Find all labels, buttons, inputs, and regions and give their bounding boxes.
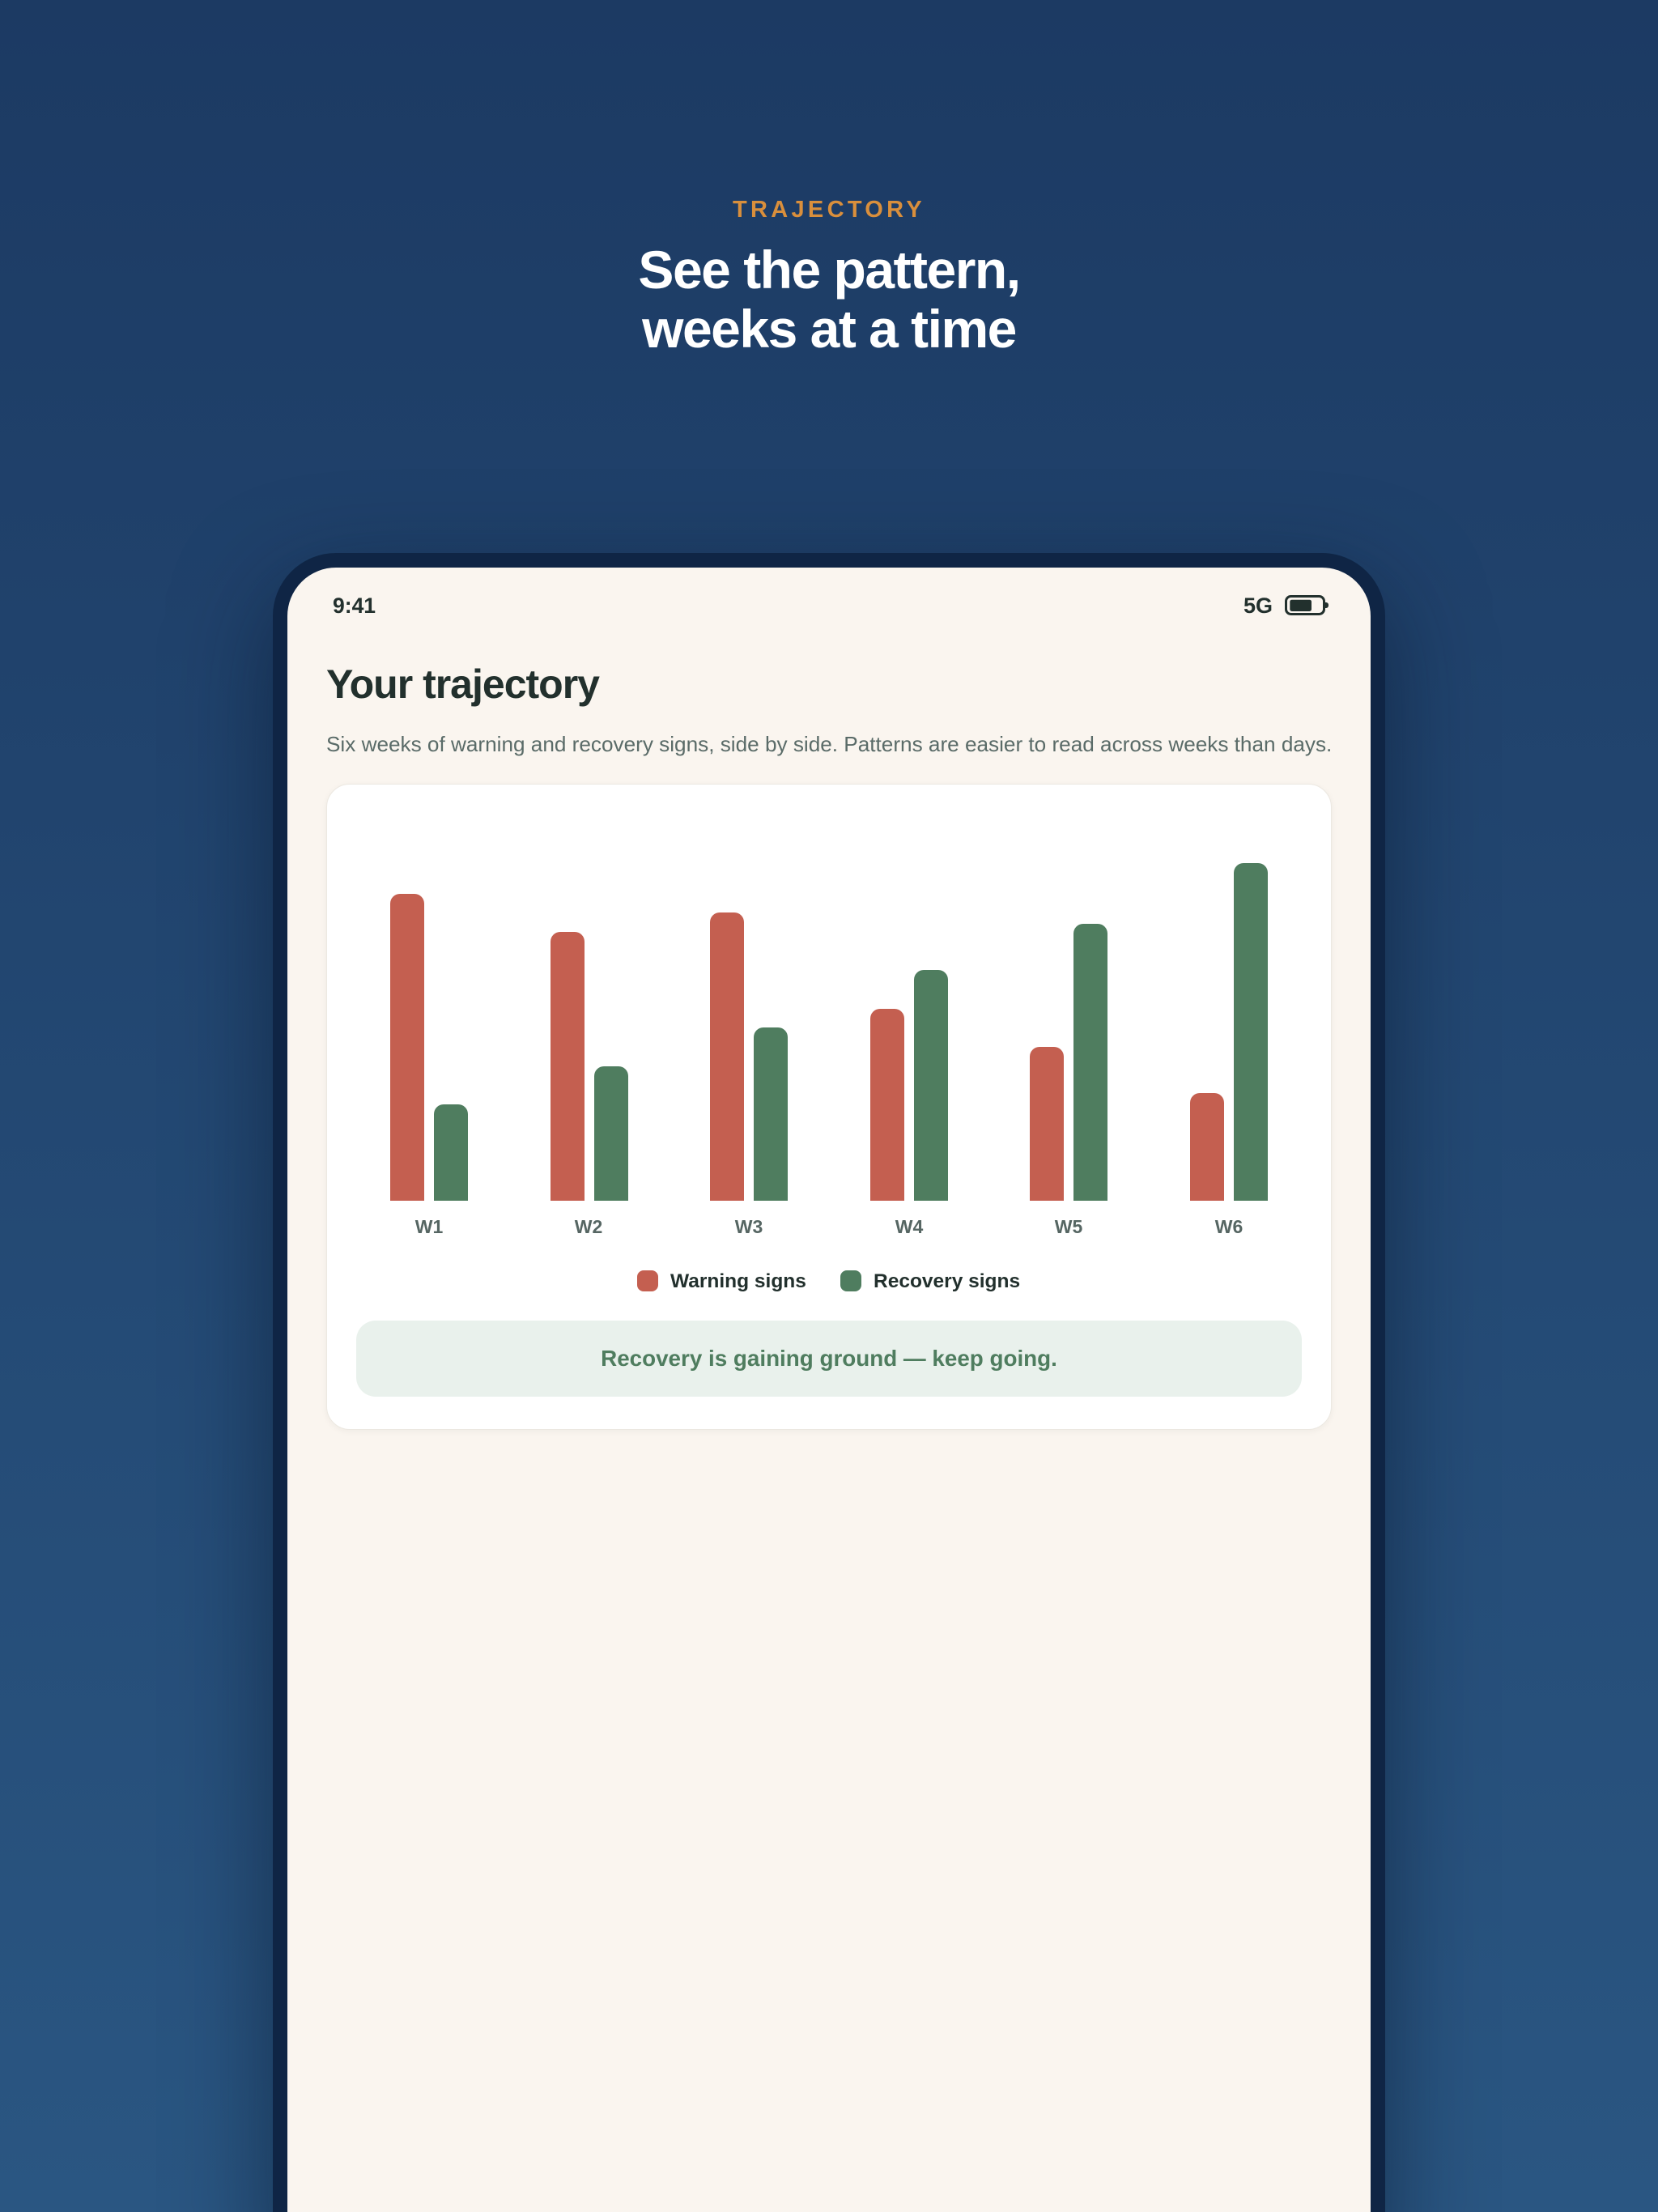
legend label: recovery: Recovery signs: [874, 1270, 1020, 1292]
headline: See the pattern,: [638, 240, 1020, 300]
panel: chart card: [326, 784, 1332, 1430]
week 3 bars: [710, 912, 788, 1201]
week labels: W5: [1055, 1216, 1082, 1237]
week labels: W3: [735, 1216, 763, 1237]
legend: [637, 1270, 1020, 1292]
icon: battery: [1285, 595, 1329, 615]
headline: weeks at a time: [642, 299, 1016, 359]
week 1 bars: [390, 894, 468, 1201]
screen title: Your trajectory: [326, 661, 599, 707]
headline: [638, 240, 1020, 359]
legend swatch: warning: [637, 1270, 658, 1291]
device frame: [273, 553, 1385, 2212]
legend swatch: recovery: [840, 1270, 861, 1291]
week labels: W6: [1215, 1216, 1243, 1237]
callout: Recovery is gaining ground — keep going.: [601, 1346, 1057, 1371]
status bar network: 5G: [1244, 593, 1273, 618]
device screen: [326, 593, 1332, 756]
callout: [356, 1321, 1302, 1397]
week 4 bars: [870, 970, 948, 1201]
week 5 bars: [1030, 924, 1107, 1201]
week 2 bars: [551, 932, 628, 1201]
week labels: W1: [415, 1216, 443, 1237]
bar chart: [390, 863, 1268, 1237]
week labels: W4: [895, 1216, 923, 1237]
week 6 bars: [1190, 863, 1268, 1201]
legend label: warning: Warning signs: [670, 1270, 806, 1292]
week labels: W2: [575, 1216, 602, 1237]
screen subtitle: Six weeks of warning and recovery signs, side by side. Patterns are easier to read across weeks than days.: [326, 732, 1332, 756]
status bar time: 9:41: [333, 593, 376, 618]
week labels: [414, 1216, 1243, 1237]
eyebrow: TRAJECTORY: TRAJECTORY: [733, 197, 925, 223]
